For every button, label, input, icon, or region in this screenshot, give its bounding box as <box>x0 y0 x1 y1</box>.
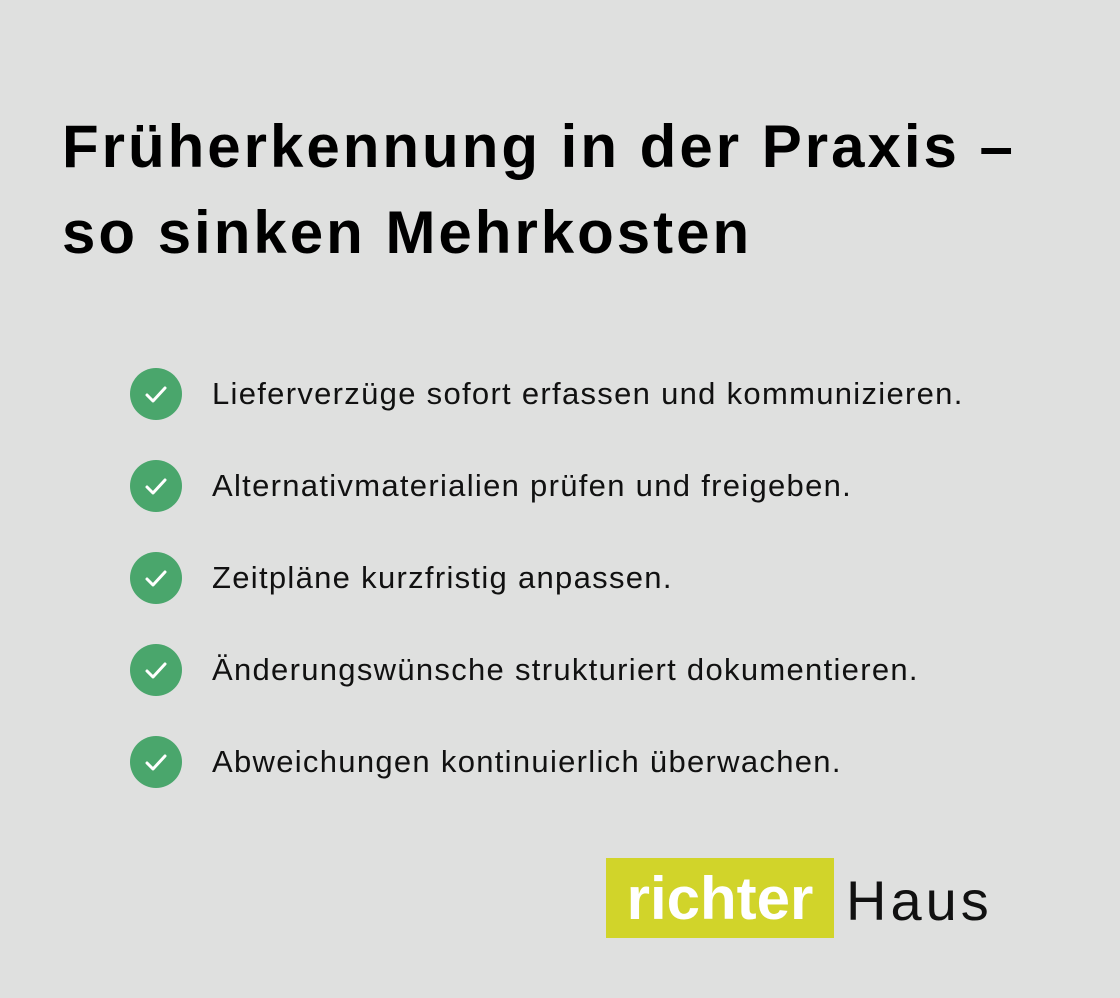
title: so sinken Mehrkosten <box>62 199 752 266</box>
item 2: Alternativmaterialien prüfen und freigeben. <box>212 468 852 503</box>
item 4: Änderungswünsche strukturiert dokumentieren. <box>212 652 919 687</box>
item 5 <box>130 736 842 788</box>
title <box>62 113 1016 266</box>
logo: Haus <box>846 869 993 932</box>
item 4 <box>130 644 919 696</box>
item 5: Abweichungen kontinuierlich überwachen. <box>212 744 842 779</box>
item 1 <box>130 368 964 420</box>
item 2 <box>130 460 852 512</box>
logo: richter <box>627 865 813 932</box>
item 3 <box>130 552 673 604</box>
checklist <box>130 368 964 788</box>
item 1: Lieferverzüge sofort erfassen und kommunizieren. <box>212 376 964 411</box>
title: Früherkennung in der Praxis – <box>62 113 1016 180</box>
item 3: Zeitpläne kurzfristig anpassen. <box>212 560 673 595</box>
logo <box>606 858 993 938</box>
